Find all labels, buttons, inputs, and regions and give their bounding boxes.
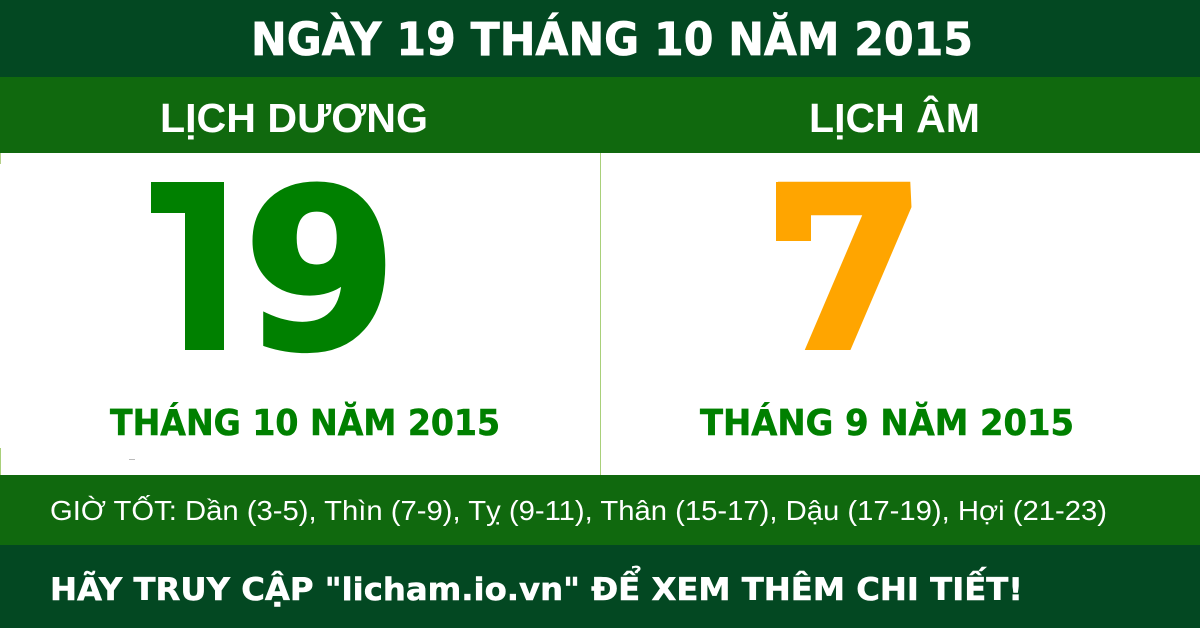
big solar day number: 9	[243, 143, 397, 401]
call to action bar: HÃY TRUY CẬP "licham.io.vn" ĐỂ XEM THÊM CHI TIẾT!	[50, 567, 1023, 608]
calendar header band	[0, 77, 1200, 153]
solar month and year: THÁNG 10 NĂM 2015	[110, 401, 500, 444]
big solar day number	[119, 138, 397, 405]
small dash	[129, 459, 135, 460]
title bar	[0, 0, 1200, 77]
panel: solar date	[0, 138, 600, 475]
good hours band	[0, 475, 1200, 545]
lunar month and year: THÁNG 9 NĂM 2015	[700, 401, 1074, 444]
title bar: NGÀY 19 THÁNG 10 NĂM 2015	[251, 13, 973, 66]
left edge mark lower	[0, 448, 1, 475]
big lunar day number: 7	[761, 137, 939, 403]
left edge mark upper	[0, 153, 1, 164]
good hours band: GIỜ TỐT: Dần (3-5), Thìn (7-9), Tỵ (9-11), Thân (15-17), Dậu (17-19), Hợi (21-23)	[50, 494, 1107, 526]
big solar day number: 1	[119, 138, 279, 405]
heading: solar calendar: LỊCH DƯƠNG	[160, 95, 428, 141]
heading: lunar calendar: LỊCH ÂM	[809, 95, 980, 141]
call to action bar	[0, 545, 1200, 628]
panel: lunar date	[700, 137, 1074, 444]
divider	[600, 153, 601, 475]
